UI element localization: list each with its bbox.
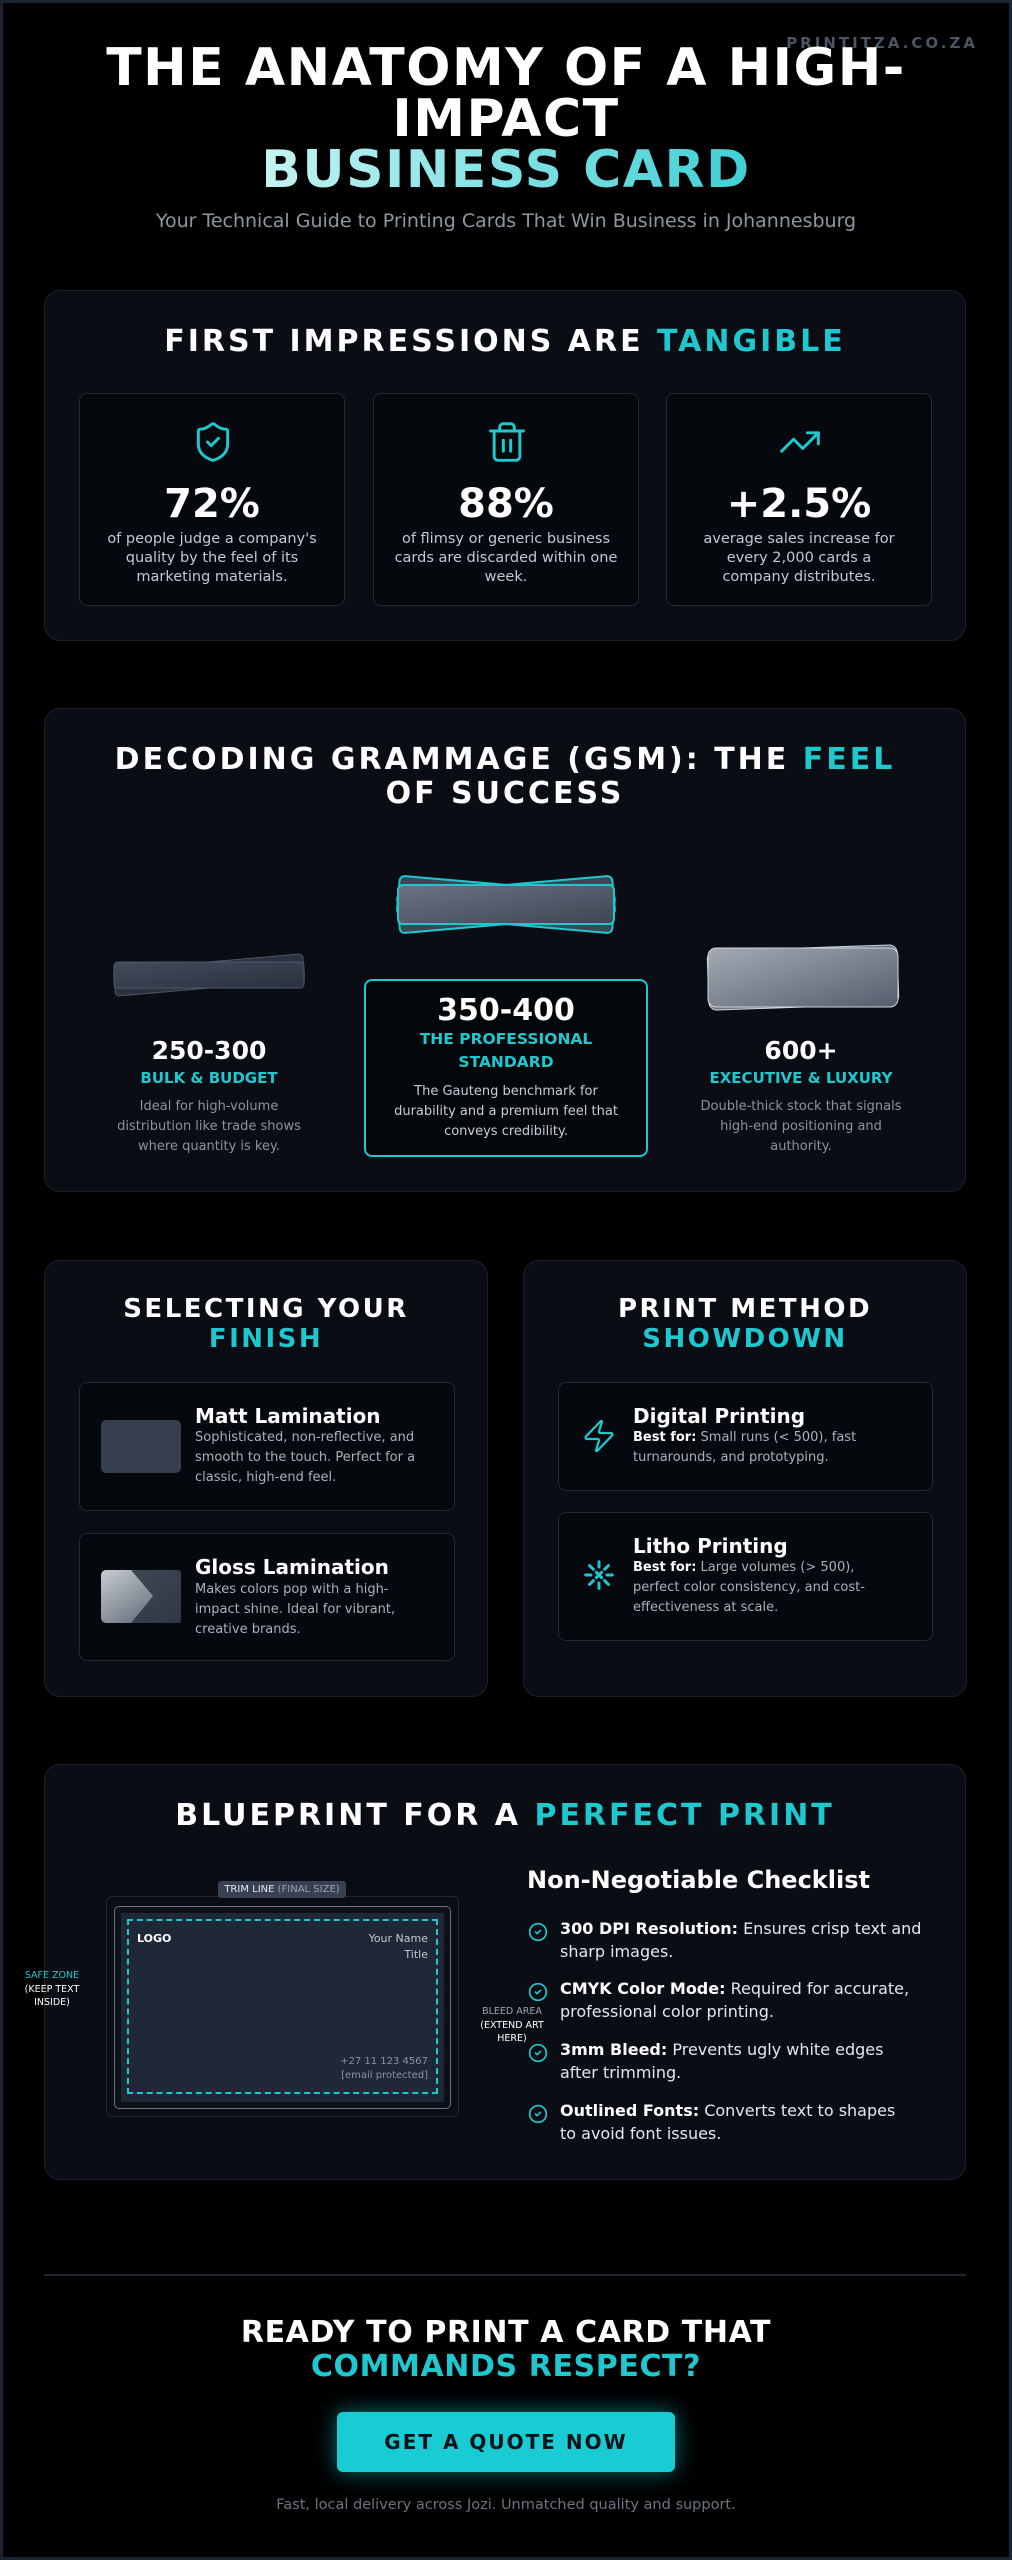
option: gloss: Gloss Lamination	[195, 1555, 389, 1579]
card text: name: Title	[404, 1948, 428, 1961]
item: fonts: Outlined Fonts: Converts text to shapes to avoid font issues.	[560, 2101, 895, 2143]
cta heading: COMMANDS RESPECT?	[311, 2349, 701, 2384]
tier: 350-400 highlighted: STANDARD	[458, 1053, 554, 1071]
heading: print method: PRINT METHOD	[618, 1294, 872, 1324]
card text: contact: +27 11 123 4567	[340, 2056, 428, 2067]
heading: blueprint: BLUEPRINT FOR A PERFECT PRINT	[175, 1798, 835, 1833]
icon: trash	[489, 422, 525, 462]
panel: first impressions	[44, 290, 966, 641]
brand domain: PRINTITZA.CO.ZA	[786, 34, 978, 52]
stat number: 88%	[458, 481, 554, 527]
title: THE ANATOMY OF A HIGH-	[106, 38, 906, 98]
trim label	[218, 1881, 346, 1898]
heading: first impressions: FIRST IMPRESSIONS ARE TANGIBLE	[164, 324, 846, 359]
safe zone label: INSIDE)	[34, 1997, 70, 2008]
swatch: gloss	[101, 1570, 181, 1623]
option: digital: Best for: Small runs (< 500), fast turnarounds, and prototyping.	[633, 1430, 856, 1465]
cta button: GET A QUOTE NOW	[384, 2430, 628, 2454]
option: litho: Litho Printing	[633, 1534, 788, 1558]
heading: print method: SHOWDOWN	[642, 1324, 848, 1354]
stack: 250-300	[113, 954, 305, 996]
panel: grammage	[44, 708, 966, 1192]
safe zone label: SAFE ZONE	[25, 1970, 79, 1981]
stack: 600+	[707, 945, 899, 1010]
safe zone label: (KEEP TEXT	[25, 1984, 79, 1994]
swatch: matt	[101, 1420, 181, 1473]
heading: finish: SELECTING YOUR	[123, 1294, 409, 1324]
option: litho: Best for: Large volumes (> 500), perfect color consistency, and cost-effectiveness at scale.	[633, 1560, 865, 1615]
trim line box	[114, 1906, 451, 2109]
footnote: Fast, local delivery across Jozi. Unmatched quality and support.	[276, 2497, 736, 2513]
heading: print method	[618, 1294, 872, 1354]
cta heading	[241, 2315, 771, 2384]
bleed area label: BLEED AREA	[482, 2006, 542, 2017]
bleed fill	[121, 1913, 444, 2102]
card text: name: Your Name	[369, 1932, 428, 1945]
heading: finish: FINISH	[209, 1324, 323, 1354]
bleed area label: HERE)	[497, 2033, 527, 2044]
tier: 600+: EXECUTIVE & LUXURY	[710, 1069, 892, 1087]
tier: 250-300	[117, 1036, 301, 1154]
icon: shield check	[196, 422, 230, 462]
stat card: +2.5%	[666, 393, 932, 606]
heading: finish	[123, 1294, 409, 1354]
card text: contact: [email protected]	[341, 2070, 428, 2081]
tier: 600+: Double-thick stock that signals high-end positioning and authority.	[701, 1099, 901, 1154]
heading: grammage: DECODING GRAMMAGE (GSM): THE FEEL	[115, 742, 895, 777]
item: bleed: 3mm Bleed: Prevents ugly white edges after trimming.	[560, 2040, 883, 2082]
stat description: average sales increase for every 2,000 cards a company distributes.	[703, 531, 895, 585]
tier: 250-300: 250-300	[152, 1036, 266, 1065]
tier: 600+	[701, 1036, 901, 1154]
option: matt: Sophisticated, non-reflective, and smooth to the touch. Perfect for a classic, high-end feel.	[195, 1430, 415, 1485]
trim label: TRIM LINE (FINAL SIZE)	[224, 1884, 340, 1895]
tier: 350-400 highlighted: The Gauteng benchmark for durability and a premium feel that conveys credibility.	[394, 1084, 618, 1139]
card stack illustrations	[113, 875, 900, 1010]
bleed area label: (EXTEND ART	[480, 2020, 544, 2030]
tier: 600+: 600+	[764, 1036, 838, 1065]
item: cmyk: CMYK Color Mode: Required for accurate, professional color printing.	[560, 1979, 909, 2021]
stat number: 72%	[164, 481, 260, 527]
stat description: of people judge a company's quality by the feel of its marketing materials.	[107, 531, 317, 585]
stat description: of flimsy or generic business cards are discarded within one week.	[395, 531, 617, 585]
panel: blueprint	[44, 1764, 966, 2180]
title	[106, 38, 906, 200]
stack: 350-400	[397, 876, 615, 933]
option: digital: Digital Printing	[633, 1404, 805, 1428]
heading: grammage: OF SUCCESS	[386, 776, 624, 811]
icon: litho loader	[584, 1560, 614, 1590]
safe zone dashed	[127, 1919, 438, 2094]
panel: finish	[44, 1260, 488, 1697]
tier: 350-400 highlighted: 350-400	[437, 993, 575, 1028]
option: matt: Matt Lamination	[195, 1404, 381, 1428]
heading: grammage	[115, 742, 895, 811]
title: BUSINESS CARD	[261, 140, 751, 200]
panel: print method	[523, 1260, 967, 1697]
option: litho	[558, 1512, 933, 1641]
checklist	[528, 1919, 921, 2143]
tier: 350-400 highlighted: THE PROFESSIONAL	[420, 1030, 592, 1048]
option: matt	[79, 1382, 455, 1511]
tier: 350-400 highlighted	[364, 979, 648, 1157]
option: gloss: Makes colors pop with a high-impact shine. Ideal for vibrant, creative brands.	[195, 1582, 395, 1637]
item: dpi: 300 DPI Resolution: Ensures crisp text and sharp images.	[560, 1919, 921, 1961]
title: IMPACT	[392, 89, 620, 149]
stat number: +2.5%	[727, 481, 871, 527]
card text: contact	[340, 2056, 428, 2081]
stat card: 88%	[373, 393, 639, 606]
stat card: 72%	[79, 393, 345, 606]
subtitle: Your Technical Guide to Printing Cards That Win Business in Johannesburg	[156, 210, 856, 232]
icon: trending up	[780, 431, 820, 453]
cta button	[337, 2412, 675, 2472]
card text: name	[368, 1932, 428, 1961]
icon: lightning	[584, 1420, 614, 1452]
option: gloss	[79, 1533, 455, 1661]
card diagram	[106, 1896, 459, 2117]
checklist heading: Non-Negotiable Checklist	[527, 1866, 870, 1894]
tier: 250-300: Ideal for high-volume distribution like trade shows where quantity is key.	[117, 1099, 301, 1154]
card text: logo: LOGO	[137, 1932, 171, 1945]
option: digital	[558, 1382, 933, 1491]
bleed area label	[480, 2006, 544, 2044]
safe zone label	[25, 1970, 80, 2008]
tier: 250-300: BULK & BUDGET	[140, 1069, 278, 1087]
cta heading: READY TO PRINT A CARD THAT	[241, 2315, 771, 2350]
